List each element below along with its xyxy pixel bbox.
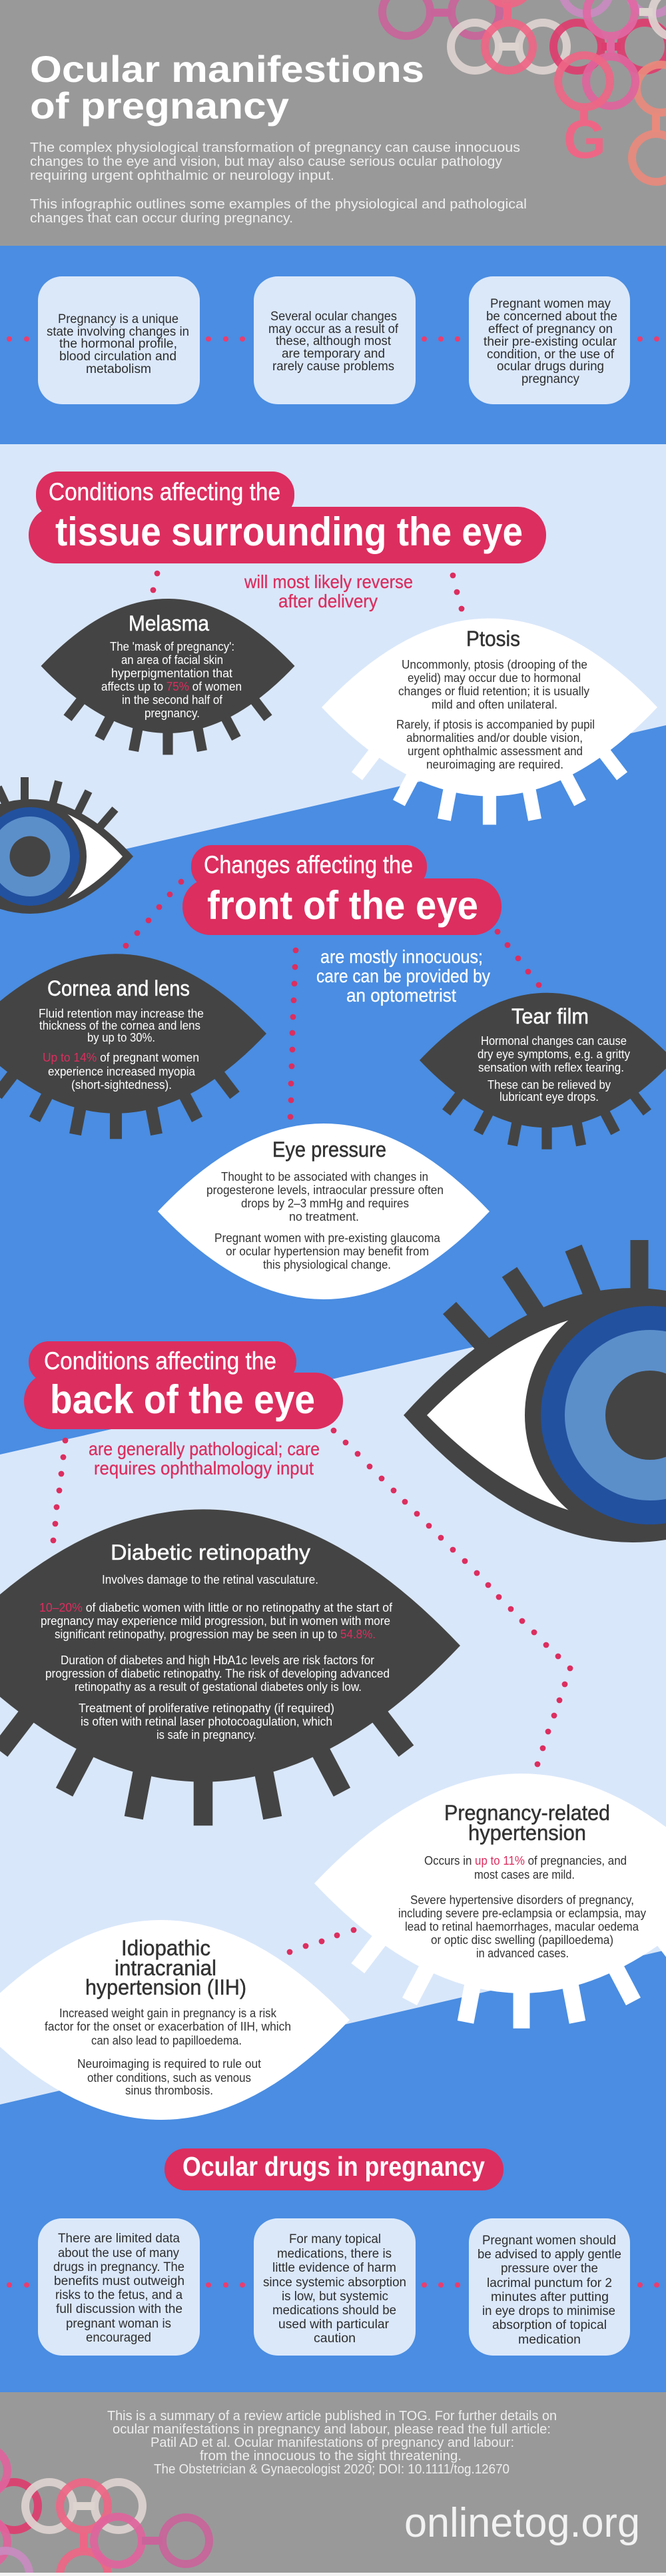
drugs box 3 — [469, 2218, 630, 2356]
intro box 3: condition, or the use of — [487, 348, 615, 362]
eye panel: ptosis: changes or fluid retention; it is usually — [398, 685, 589, 698]
eye panel: melasma — [41, 599, 295, 755]
eye panel: cornea and lens: by up to 30%. — [87, 1031, 155, 1044]
heading: ocular drugs in pregnancy — [165, 2148, 503, 2190]
heading: tissue surrounding the eye: tissue surrounding the eye — [55, 509, 523, 554]
intro box 1: the hormonal profile, — [59, 337, 177, 351]
subheading: generally pathological: are generally pathological; care — [89, 1439, 320, 1459]
eye panel: cornea and lens: thickness of the cornea and lens — [39, 1019, 200, 1032]
eye panel: diabetic retinopathy: progression of diabetic retinopathy. The risk of developing advanced — [45, 1667, 390, 1680]
dotted connectors: front of the eye — [123, 879, 541, 1120]
drugs box 3: lacrimal punctum for 2 — [487, 2276, 612, 2290]
intro box 3: be concerned about the — [486, 310, 617, 324]
footer citation text: ocular manifestations in pregnancy and labour, please read the full article: — [113, 2422, 551, 2437]
intro text: The complex physiological transformation of pregnancy can cause innocuous — [30, 141, 520, 155]
eye panel: pregnancy-related hypertension: Occurs in up to 11% of pregnancies, and — [424, 1854, 627, 1867]
drugs box 1: benefits must outweigh — [54, 2274, 184, 2288]
intro box 2: rarely cause problems — [272, 360, 394, 374]
intro box 3: Pregnant women may — [490, 297, 611, 311]
eye panel: idiopathic intracranial hypertension: other conditions, such as venous — [87, 2071, 251, 2085]
eye panel: eye pressure: this physiological change. — [263, 1258, 391, 1271]
dotted connectors: back of the eye — [51, 1428, 573, 1955]
eye panel: ptosis: Ptosis — [466, 627, 520, 651]
bottom edge strip — [0, 2573, 666, 2576]
intro box 1: Pregnancy is a unique — [58, 312, 178, 326]
eye panel: pregnancy-related hypertension: or optic disc swelling (papilloedema) — [431, 1933, 613, 1947]
heading: front of the eye — [182, 845, 501, 935]
title — [30, 48, 424, 127]
drugs box 2: medications should be — [272, 2304, 396, 2318]
eye panel: melasma: The 'mask of pregnancy': — [110, 640, 234, 653]
eye panel: melasma: Melasma — [129, 611, 209, 635]
footer citation text — [107, 2409, 557, 2477]
eye panel: diabetic retinopathy: pregnancy may experience mild progression, but in women with more — [41, 1614, 390, 1628]
drugs box 1: pregnant woman is — [66, 2317, 171, 2331]
eye panel: pregnancy-related hypertension: hypertension — [468, 1821, 586, 1845]
title: Ocular manifestions — [30, 48, 424, 90]
drugs box 3: Pregnant women should — [482, 2234, 616, 2248]
eye panel: diabetic retinopathy: Diabetic retinopathy — [111, 1540, 310, 1564]
drugs box 2: little evidence of harm — [272, 2261, 396, 2275]
drugs box 1: full discussion with the — [56, 2302, 182, 2316]
drugs box 2: since systemic absorption — [263, 2276, 406, 2290]
heading: back of the eye: Conditions affecting the — [44, 1347, 276, 1375]
subheading: mostly innocuous: are mostly innocuous; — [320, 946, 483, 967]
eye panel: ptosis: eyelid) may occur due to hormonal — [408, 671, 581, 685]
eye panel: pregnancy-related hypertension: lead to retinal haemorrhages, macular oedema — [405, 1920, 639, 1933]
drugs box 2: For many topical — [289, 2232, 381, 2246]
icon: big right eye — [404, 1240, 666, 1542]
intro text — [30, 141, 527, 226]
subheading: will most likely reverse — [244, 571, 413, 611]
eye panel: ptosis: neuroimaging are required. — [426, 758, 563, 771]
eye panel: diabetic retinopathy: Treatment of proliferative retinopathy (if required) — [79, 1702, 334, 1715]
eye panel: eye pressure: or ocular hypertension may benefit from — [226, 1245, 429, 1258]
drugs box 1 — [38, 2218, 200, 2356]
eye panel: ptosis: Uncommonly, ptosis (drooping of the — [402, 658, 587, 671]
drugs box 2: is low, but systemic — [282, 2290, 388, 2304]
eye panel: cornea and lens: Cornea and lens — [47, 976, 190, 1000]
eye panel: tear film: lubricant eye drops. — [500, 1090, 599, 1104]
footer grey panel — [0, 2392, 666, 2576]
eye panel: eye pressure: progesterone levels, intraocular pressure often — [206, 1183, 444, 1197]
drugs box 1: There are limited data — [58, 2232, 180, 2246]
intro box 3: their pre-existing ocular — [484, 335, 617, 349]
eye panel: eye pressure: Pregnant women with pre-existing glaucoma — [214, 1231, 441, 1245]
eye panel: ptosis: mild and often unilateral. — [432, 698, 557, 711]
drugs dotted connector — [7, 2282, 659, 2288]
intro box 3 — [469, 276, 630, 404]
eye panel: idiopathic intracranial hypertension: can also lead to papilloedema. — [91, 2034, 242, 2047]
eye panel: idiopathic intracranial hypertension: sinus thrombosis. — [125, 2084, 213, 2097]
drugs box 3: pressure over the — [501, 2262, 598, 2276]
eye panel: pregnancy-related hypertension — [314, 1773, 666, 2029]
eye panel: diabetic retinopathy: significant retinopathy, progression may be seen in up to 54.8%. — [55, 1628, 376, 1641]
subheading: mostly innocuous: an optometrist — [346, 985, 456, 1006]
diagonal blue panel: ocular drugs — [0, 1950, 666, 2392]
intro text: requiring urgent ophthalmic or neurology input. — [30, 168, 334, 183]
eye panel: eye pressure — [158, 1124, 490, 1299]
eye panel: ptosis: urgent ophthalmic assessment and — [408, 745, 583, 758]
eye panel: idiopathic intracranial hypertension: hypertension (IIH) — [85, 1975, 246, 1999]
decorative hormone rings, top right — [382, 0, 666, 182]
drugs box 3: medication — [518, 2333, 581, 2347]
intro box 3: effect of pregnancy on — [488, 322, 613, 336]
eye panel: ptosis: Rarely, if ptosis is accompanied by pupil — [396, 718, 595, 731]
drugs box 2: used with particular — [278, 2318, 390, 2332]
eye panel: eye pressure: Eye pressure — [272, 1137, 386, 1161]
eye panel: cornea and lens: Up to 14% of pregnant women — [43, 1051, 199, 1064]
drugs box 1: drugs in pregnancy. The — [53, 2260, 184, 2274]
subheading: generally pathological — [89, 1439, 320, 1478]
footer citation text: The Obstetrician & Gynaecologist 2020; DOI: 10.1111/tog.12670 — [154, 2462, 509, 2477]
eye panel: melasma: an area of facial skin — [121, 653, 223, 667]
intro box 1: state involving changes in — [47, 325, 189, 339]
eye panel: ptosis — [322, 618, 657, 824]
intro text: changes to the eye and vision, but may also cause serious ocular pathology — [30, 155, 502, 169]
header grey panel — [0, 0, 666, 246]
eye panel: idiopathic intracranial hypertension: Increased weight gain in pregnancy is a risk — [59, 2007, 277, 2020]
eye panel: diabetic retinopathy: 10–20% of diabetic women with little or no retinopathy at the start of — [39, 1601, 393, 1614]
drugs box 1: about the use of many — [58, 2246, 179, 2260]
heading: ocular drugs in pregnancy: Ocular drugs in pregnancy — [182, 2151, 485, 2182]
title: of pregnancy — [30, 85, 289, 127]
intro text: changes that can occur during pregnancy. — [30, 211, 293, 226]
drugs box 1: risks to the fetus, and a — [55, 2288, 182, 2302]
heading: tissue surrounding the eye: Conditions affecting the — [49, 478, 280, 505]
footer citation text: Patil AD et al. Ocular manifestations of pregnancy and labour: — [151, 2435, 514, 2450]
eye panel: diabetic retinopathy: is often with retinal laser photocoagulation, which — [81, 1715, 332, 1728]
drugs box 3: absorption of topical — [492, 2318, 607, 2332]
eye panel: eye pressure: no treatment. — [289, 1210, 359, 1223]
eye panel: tear film: These can be relieved by — [488, 1078, 611, 1092]
eye panel: melasma: in the second half of — [122, 693, 223, 707]
decorative hormone rings, bottom left — [0, 2447, 209, 2576]
drugs box 3: in eye drops to minimise — [482, 2304, 615, 2318]
eye panel: tear film: sensation with reflex tearing. — [478, 1061, 624, 1074]
eye panel: pregnancy-related hypertension: Severe hypertensive disorders of pregnancy, — [410, 1893, 634, 1907]
intro dotted connector — [7, 336, 659, 342]
eye panel: pregnancy-related hypertension: Pregnancy-related — [444, 1801, 610, 1825]
drugs box 2: medications, there is — [277, 2247, 392, 2261]
eye panel: cornea and lens: experience increased myopia — [48, 1065, 196, 1078]
drugs box 3: minutes after putting — [491, 2290, 609, 2304]
heading: front of the eye: front of the eye — [207, 883, 478, 928]
eye panel: tear film — [420, 993, 666, 1149]
subheading: will most likely reverse: after delivery — [278, 591, 378, 611]
eye panel: cornea and lens — [0, 954, 266, 1139]
eye panel: tear film: Hormonal changes can cause — [481, 1034, 627, 1048]
eye panel: diabetic retinopathy: is safe in pregnancy. — [157, 1728, 256, 1742]
intro box 1 — [38, 276, 200, 404]
footer citation text: This is a summary of a review article published in TOG. For further details on — [107, 2409, 557, 2423]
intro box 2: Several ocular changes — [270, 310, 397, 324]
eye panel: melasma: affects up to 75% of women — [101, 680, 242, 693]
icon: left open eye — [0, 777, 133, 914]
intro box 1: metabolism — [86, 362, 151, 376]
subheading: generally pathological: requires ophthalmology input — [94, 1458, 314, 1478]
subheading: mostly innocuous — [316, 946, 490, 1006]
eye panel: melasma: hyperpigmentation that — [111, 667, 232, 680]
eye panel: diabetic retinopathy — [0, 1509, 460, 1825]
eye panel: pregnancy-related hypertension: including severe pre-eclampsia or eclampsia, may — [398, 1907, 646, 1920]
heading: front of the eye: Changes affecting the — [204, 851, 413, 878]
drugs box 2: caution — [314, 2332, 356, 2346]
heading: tissue surrounding the eye — [29, 472, 546, 563]
eye panel: idiopathic intracranial hypertension: intracranial — [115, 1956, 216, 1980]
intro box 2: are temporary and — [282, 347, 385, 361]
intro box 2 — [254, 276, 416, 404]
footer citation text: from the innocuous to the sight threatening. — [200, 2449, 462, 2463]
eye panel: cornea and lens: (short-sightedness). — [71, 1078, 172, 1092]
eye panel: idiopathic intracranial hypertension: Idiopathic — [121, 1936, 210, 1960]
eye panel: melasma: pregnancy. — [145, 707, 200, 720]
heading: back of the eye — [24, 1341, 343, 1429]
eye panel: idiopathic intracranial hypertension — [0, 1920, 350, 2120]
drugs box 2 — [254, 2218, 416, 2356]
heading: back of the eye: back of the eye — [50, 1377, 315, 1422]
subheading: mostly innocuous: care can be provided by — [316, 966, 490, 986]
intro box 2: may occur as a result of — [268, 322, 399, 336]
diagonal blue band: front of the eye — [0, 725, 666, 1454]
eye panel: tear film: dry eye symptoms, e.g. a gritty — [478, 1048, 630, 1061]
eye panel: diabetic retinopathy: retinopathy as a result of gestational diabetes only is low. — [75, 1680, 362, 1694]
eye panel: pregnancy-related hypertension: most cases are mild. — [474, 1868, 575, 1881]
intro blue panel — [0, 246, 666, 444]
dotted connectors to melasma and ptosis — [151, 571, 464, 611]
eye panel: eye pressure: Thought to be associated with changes in — [221, 1170, 428, 1183]
subheading: will most likely reverse: will most likely reverse — [244, 571, 413, 592]
eye panel: diabetic retinopathy: Duration of diabetes and high HbA1c levels are risk factors for — [61, 1654, 374, 1667]
decorative hormone rings, top right: G — [563, 109, 606, 170]
drugs box 1: encouraged — [86, 2331, 151, 2345]
intro box 3: pregnancy — [521, 372, 579, 386]
intro box 3: ocular drugs during — [497, 360, 604, 374]
drugs box 3: be advised to apply gentle — [478, 2248, 621, 2262]
eye panel: ptosis: abnormalities and/or double vision, — [406, 731, 583, 745]
eye panel: diabetic retinopathy: Involves damage to the retinal vasculature. — [102, 1573, 318, 1586]
intro box 2: these, although most — [276, 334, 392, 348]
eye panel: cornea and lens: Fluid retention may increase the — [39, 1007, 204, 1020]
intro box 1: blood circulation and — [59, 350, 176, 364]
eye panel: eye pressure: drops by 2–3 mmHg and requires — [241, 1197, 409, 1210]
eye panel: idiopathic intracranial hypertension: factor for the onset or exacerbation of IIH, which — [45, 2020, 291, 2033]
footer website: onlinetog.org — [404, 2500, 640, 2546]
eye panel: tear film: Tear film — [511, 1004, 589, 1028]
intro text: This infographic outlines some examples of the physiological and pathological — [30, 197, 527, 212]
eye panel: idiopathic intracranial hypertension: Neuroimaging is required to rule out — [77, 2057, 261, 2071]
eye panel: pregnancy-related hypertension: in advanced cases. — [476, 1947, 569, 1960]
